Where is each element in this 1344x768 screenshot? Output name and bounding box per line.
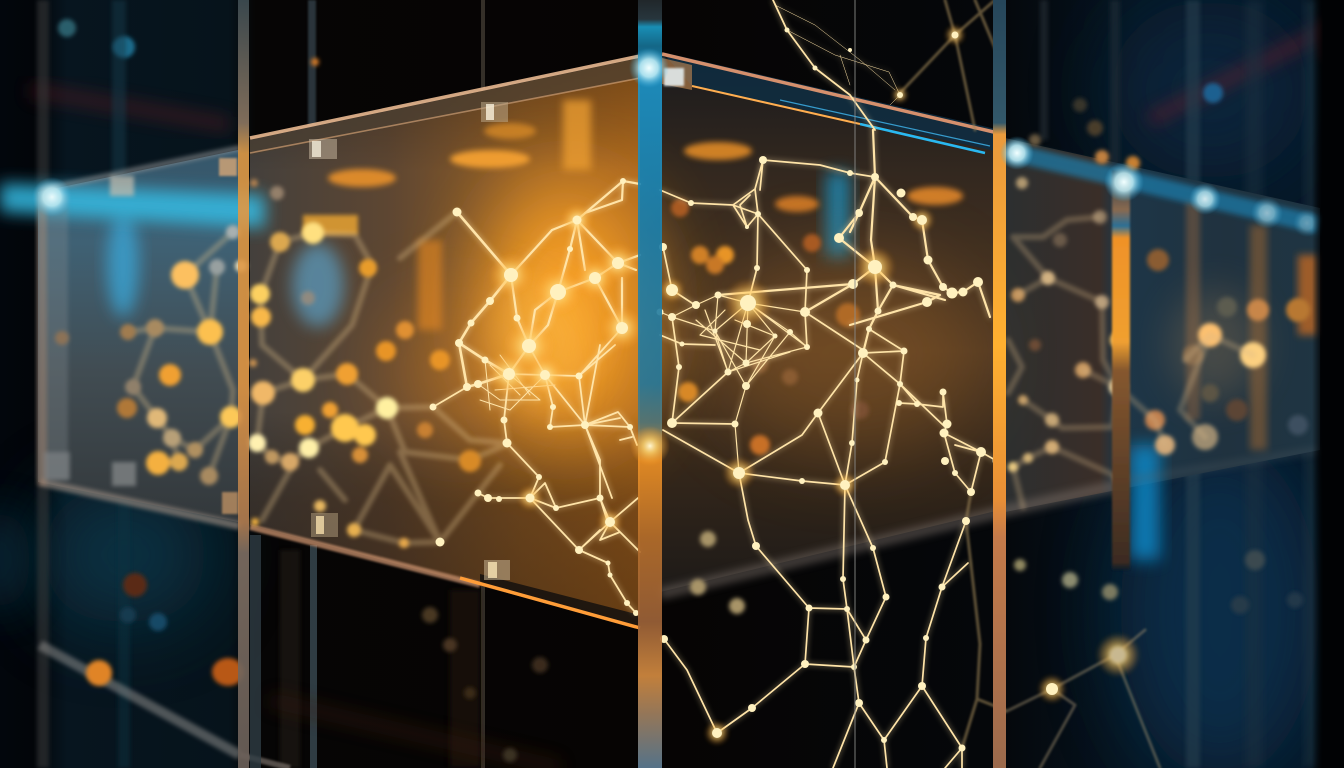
blurred network: far right	[1008, 217, 1253, 507]
right edge fade to black	[1312, 0, 1344, 768]
blurred network: lower right	[1005, 630, 1160, 768]
network: right glass face	[660, 0, 997, 768]
panel: main left glass face	[250, 58, 640, 628]
network nodes	[430, 25, 1140, 752]
network: left glass face	[433, 181, 640, 613]
thin vertical rod	[854, 0, 856, 768]
blurred bokeh lights	[55, 134, 1310, 548]
panel: far right glass face	[1005, 138, 1320, 512]
panel: main right glass face	[660, 56, 1000, 592]
soft out-of-focus strands near right post	[900, 0, 1005, 748]
glass reflections	[0, 58, 1318, 628]
panel: far left glass face	[38, 150, 238, 522]
blurred network: far left and left face	[128, 212, 507, 543]
vertical post: left	[238, 0, 261, 768]
vertical post: far right	[1112, 170, 1130, 570]
vertical post: right	[993, 0, 1006, 768]
vertical post: far-left soft glow	[37, 190, 47, 485]
vertical post: centre corner	[638, 0, 662, 768]
corner flares and glass clips	[32, 48, 1321, 580]
